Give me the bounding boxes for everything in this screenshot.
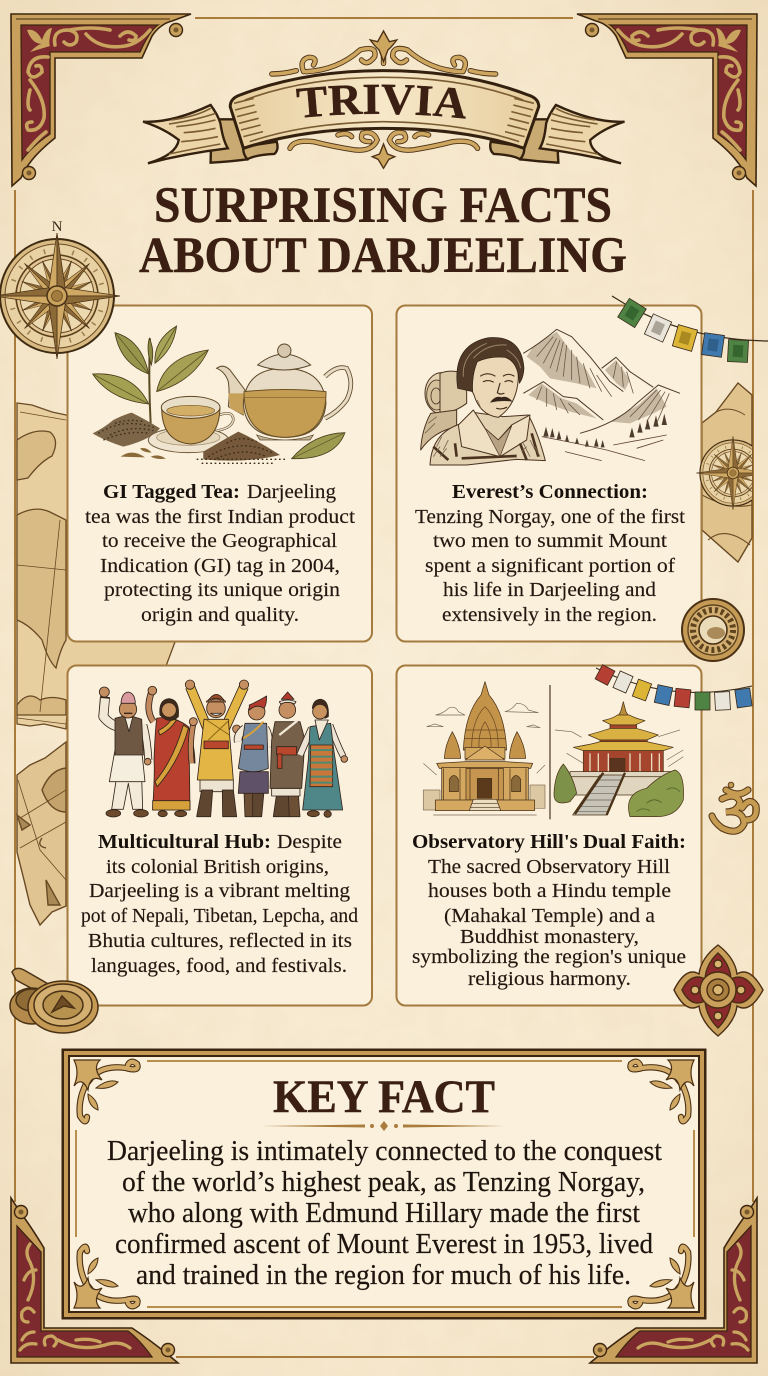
prayer flags: top right [612, 296, 768, 363]
text: Observatory Hill's dual faith: Observatory Hill's Dual Faith: [412, 831, 686, 853]
text: Observatory Hill's dual faith: (Mahakal Temple) and a [444, 905, 655, 927]
icon: om symbol [712, 782, 756, 831]
panel: Everest's connection [396, 306, 702, 642]
illustration: group of people in traditional dress [99, 680, 348, 817]
text: Everest's connection: his life in Darjeeling and [443, 579, 656, 601]
corner ornament: bottom left [11, 1198, 178, 1363]
key fact corner flourishes [74, 1060, 694, 1308]
main title: SURPRISING FACTS [154, 178, 612, 234]
icon: right side compass [696, 436, 752, 510]
text: Observatory Hill's dual faith: religious harmony. [468, 968, 631, 990]
text: multicultural hub: Darjeeling is a vibrant melting [89, 880, 350, 902]
text: GI tagged tea: origin and quality. [141, 604, 299, 626]
illustration: tea plant, cup and teapot [93, 326, 351, 463]
text: Everest's connection: Everest’s Connection: [452, 481, 648, 503]
text: Everest's connection [415, 481, 685, 626]
text: multicultural hub: pot of Nepali, Tibetan, Lepcha, and [81, 905, 358, 927]
text: GI tagged tea: Indication (GI) tag in 2004, [100, 555, 340, 577]
ornament above banner [272, 48, 496, 74]
text: GI tagged tea: Darjeeling [247, 481, 336, 503]
text: Everest's connection: Tenzing Norgay, one of the first [415, 506, 685, 528]
ribbon main band [230, 71, 539, 148]
text: Observatory Hill's dual faith: The sacred Observatory Hill [428, 856, 670, 878]
text: Everest's connection: extensively in the region. [442, 604, 657, 626]
text: multicultural hub: its colonial British origins, [106, 856, 329, 878]
illustration: Tenzing Norgay and mountains [421, 329, 680, 465]
text: Observatory Hill's dual faith [412, 831, 686, 990]
key fact text: confirmed ascent of Mount Everest in 1953, lived [115, 1228, 653, 1260]
key fact text [107, 1135, 662, 1291]
text: GI tagged tea [85, 481, 355, 626]
main title [139, 178, 627, 284]
text: Everest's connection: two men to summit Mount [433, 530, 667, 552]
panel: key fact [62, 1048, 706, 1320]
key fact text: and trained in the region for much of his life. [136, 1259, 631, 1291]
text: multicultural hub [81, 831, 358, 977]
map: left background parchment map [17, 403, 175, 729]
banner label: TRIVIA: TRIVIA [296, 84, 466, 119]
text: GI tagged tea: tea was the first Indian product [85, 506, 355, 528]
icon: medallion coin [682, 599, 744, 661]
icon: coins and seal lower left [10, 968, 98, 1033]
text: GI tagged tea: GI Tagged Tea: [103, 481, 240, 503]
icon: compass rose top left [0, 219, 120, 359]
key fact text: Darjeeling is intimately connected to the conquest [107, 1135, 662, 1167]
illustration: Hindu temple and Buddhist monastery [423, 682, 684, 819]
key fact heading: KEY FACT [273, 1071, 495, 1123]
text: Observatory Hill's dual faith: symbolizing the region's unique [412, 946, 686, 968]
key fact divider [262, 1121, 505, 1131]
text: GI tagged tea: protecting its unique origin [104, 579, 340, 601]
text: Observatory Hill's dual faith: Buddhist monastery, [460, 926, 639, 948]
ribbon tails [143, 105, 624, 163]
fleur finial above banner [370, 31, 397, 62]
panel: Observatory Hill's dual faith [396, 666, 702, 1006]
ornament below banner [290, 132, 478, 150]
key fact inner frame lines [76, 1061, 694, 1307]
icon: compass rose top left: N [52, 219, 63, 235]
corner ornament: bottom right [590, 1198, 757, 1363]
text: multicultural hub: Bhutia cultures, reflected in its [88, 930, 352, 952]
panel: multicultural hub [68, 666, 372, 1006]
corner ornament: top right [577, 14, 757, 186]
key fact text: of the world’s highest peak, as Tenzing Norgay, [122, 1166, 645, 1198]
text: GI tagged tea: to receive the Geographical [102, 530, 337, 552]
corner ornament: top left [11, 14, 191, 186]
banner: trivia scroll [142, 30, 625, 170]
text: Everest's connection: spent a significant portion of [425, 555, 675, 577]
icon: floral mandala ornament [674, 945, 763, 1036]
text: Observatory Hill's dual faith: houses both a Hindu temple [428, 880, 671, 902]
main title: ABOUT DARJEELING [139, 228, 627, 284]
prayer flags: lower right [595, 665, 752, 710]
map: lower left parchment map [17, 742, 66, 925]
panel: GI tagged tea [68, 306, 372, 642]
text: multicultural hub: languages, food, and festivals. [91, 955, 347, 977]
text: multicultural hub: Despite [277, 831, 342, 853]
fleur finial below banner [372, 144, 395, 168]
key fact text: who along with Edmund Hillary made the first [128, 1197, 640, 1229]
text: multicultural hub: Multicultural Hub: [98, 831, 271, 853]
map: right parchment map [702, 383, 752, 562]
